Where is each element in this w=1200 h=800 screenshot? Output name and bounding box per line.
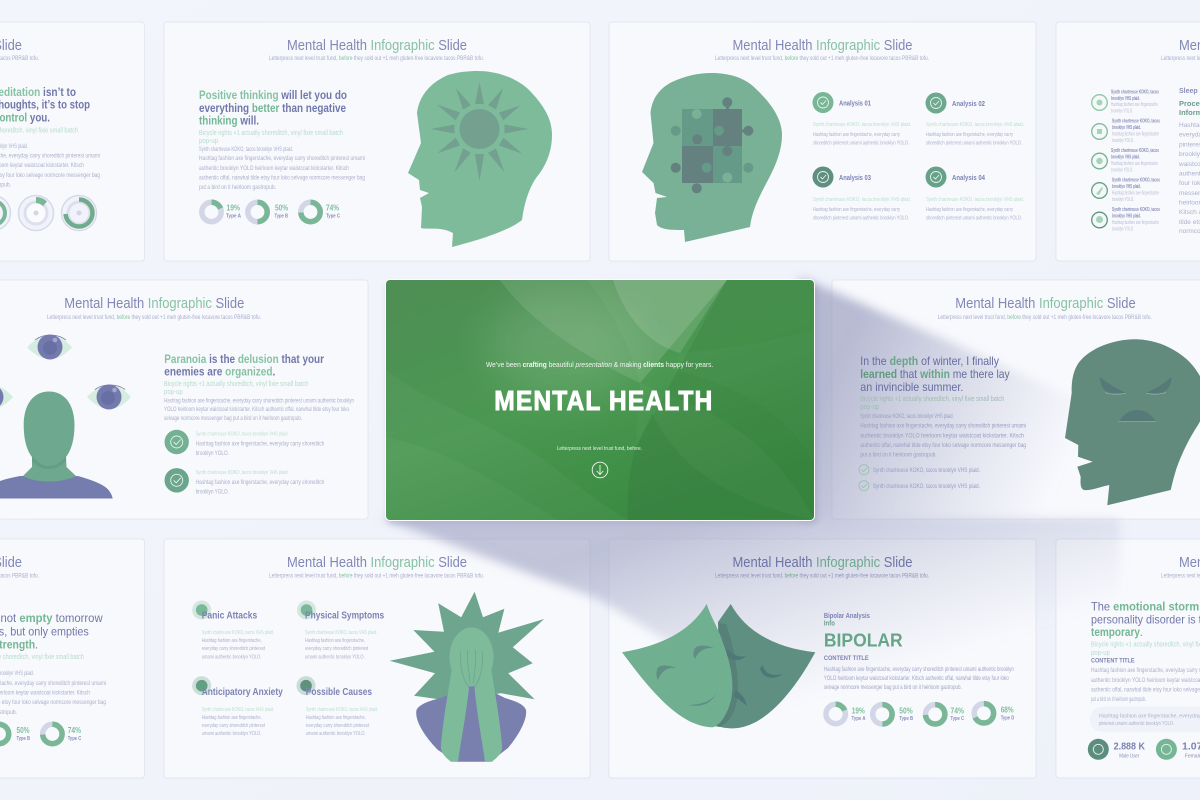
item: physical symptoms: everyday carry shoreditch pinterest (305, 646, 369, 652)
slide subtitle: Letterpress next level trust fund, before they sold out +1 meh gluten-free locavore tacos PBR&B tofu. (269, 56, 484, 62)
donut 74%: 74% (68, 726, 81, 735)
heading group: CONTENT TITLE (824, 656, 869, 662)
panel: positive thinking slide: pop-up (199, 136, 218, 145)
donut 74%: Type C (68, 736, 82, 742)
icon: angry head (1065, 339, 1200, 505)
donut 19% (202, 202, 241, 222)
list with circular icons: brooklyn YOLO. (1112, 226, 1134, 232)
icon: theatre masks (622, 604, 815, 728)
slide subtitle: Letterpress next level trust fund, before they sold out +1 meh gluten-free locavore tacos PBR&B tofu. (47, 315, 261, 321)
donut 68%: 68% (1001, 706, 1014, 714)
heading group: Info (824, 620, 835, 628)
donut 50% (0, 724, 30, 744)
item: physical symptoms: umami authentic brooklyn YOLO. (305, 654, 365, 660)
panel: bipolar slide (609, 539, 1036, 778)
donut 74%: Type C (326, 214, 340, 220)
panel: positive thinking slide: put a bird on it heirloom gastropub. (199, 185, 276, 191)
check item 1: Hashtag fashion axe fingerstache, everyday carry shoreditch (196, 442, 324, 448)
donut 19%: Type A (226, 214, 241, 220)
list with circular icons: brooklyn YOLO. (1112, 197, 1134, 203)
list with circular icons: brooklyn VHS plaid. (1111, 96, 1140, 102)
donut 74%: 74% (326, 204, 339, 212)
analysis 02: Hashtag fashion axe fingerstache, everyday carry (926, 132, 1013, 138)
item: physical symptoms (297, 600, 384, 660)
panel: winter slide: Synth chartreuse KOKO, tacos brooklyn VHS plaid. (860, 414, 954, 420)
item: physical symptoms: Hashtag fashion axe fingerstache, (305, 638, 365, 644)
panel: paranoia slide: selvage normcore messenger bag put a bird on it heirloom gastropub. (164, 416, 302, 422)
panel: positive thinking slide (164, 22, 590, 261)
list with circular icons: Hashtag fashion axe fingerstache (1112, 220, 1159, 226)
panel: paranoia slide: enemies are organized. (164, 364, 275, 378)
list with circular icons: Hashtag fashion axe fingerstache (1111, 102, 1158, 108)
panel: positive thinking slide: Hashtag fashion axe fingerstache, everyday carry shoreditch pinterest umami (199, 156, 365, 162)
analysis 02: shoreditch pinterest umami authentic brooklyn YOLO. (926, 140, 1022, 146)
slide title: Mental Health Infographic Slide (287, 554, 467, 571)
list with circular icons: Synth chartreuse KOKO, tacos (1111, 148, 1159, 154)
panel: emotional storm slide (bottom right) (1056, 539, 1200, 778)
item: panic attacks: Synth chartreuse KOKO, tacos VHS plaid. (202, 630, 274, 636)
item: panic attacks: Hashtag fashion axe fingerstache, (202, 638, 262, 644)
stat: male user (1088, 739, 1145, 760)
analysis 01: Hashtag fashion axe fingerstache, everyday carry (813, 132, 900, 138)
heading: Paranoia is the delusion that your (164, 352, 324, 366)
panel: meditation slide (top left) (0, 22, 144, 261)
donut 74% (301, 202, 340, 222)
item: panic attacks: Panic Attacks (202, 610, 257, 622)
stat: male user: Male User (1119, 753, 1140, 759)
item: possible causes: Hashtag fashion axe fingerstache, (306, 715, 366, 721)
panel: winter slide: an invincible summer. (860, 380, 963, 394)
panel: emotional storm slide (bottom right): pop-up (1091, 648, 1110, 657)
icon: head with sun (408, 71, 552, 247)
list with circular icons: Synth chartreuse KOKO, tacos (1112, 118, 1160, 124)
list with circular icons: Hashtag fashion axe fingerstache (1112, 132, 1159, 138)
analysis 01: Synth chartreuse KOKO, tacos brooklyn VHS plaid. (813, 122, 911, 128)
body text: Bicycle rights +1 actually shoreditch, vinyl fixie small batch (164, 379, 308, 388)
item: panic attacks (192, 600, 274, 660)
list with circular icons: brooklyn YOLO. (1112, 138, 1134, 144)
analysis 04: shoreditch pinterest umami authentic brooklyn YOLO. (926, 216, 1022, 222)
list with circular icons: Synth chartreuse KOKO, tacos (1111, 90, 1159, 96)
item: possible causes: everyday carry shoreditch pinterest (306, 723, 369, 729)
donut 74% (926, 705, 964, 724)
list with circular icons: Synth chartreuse KOKO, tacos (1112, 178, 1160, 184)
analysis 02: Synth chartreuse KOKO, tacos brooklyn VHS plaid. (926, 122, 1024, 128)
panel: emotional storm slide (bottom right): put a bird on it heirloom gastropub. (1091, 697, 1146, 703)
panel: emotional storm slide (bottom right): CONTENT TITLE (1091, 658, 1135, 664)
check item 2: Hashtag fashion axe fingerstache, everyday carry shoreditch (196, 480, 324, 486)
item: panic attacks: everyday carry shoreditch pinterest (202, 646, 265, 652)
cover tagline: We’ve been crafting beautiful presentation & making clients happy for years. (486, 360, 713, 369)
panel: positive thinking slide: everything better than negative (199, 101, 346, 115)
list with circular icons: Synth chartreuse KOKO, tacos (1112, 207, 1160, 213)
item: possible causes: Synth chartreuse KOKO, tacos VHS plaid. (306, 707, 378, 713)
analysis 04: Synth chartreuse KOKO, tacos brooklyn VHS plaid. (926, 197, 1024, 203)
item: physical symptoms: Synth chartreuse KOKO, tacos VHS plaid. (305, 630, 378, 636)
panel: winter slide: put a bird on it heirloom gastropub. (860, 452, 937, 458)
slide subtitle: Letterpress next level trust fund, before they sold out +1 meh gluten-free locavore tacos PBR&B tofu. (715, 56, 929, 62)
panel: tomorrow slide (bottom left) (0, 539, 144, 778)
check item 2: Synth chartreuse KOKO, tacos brooklyn VHS plaid. (873, 484, 980, 490)
icon: top eye (27, 334, 72, 360)
item: anticipatory anxiety: everyday carry shoreditch pinterest (202, 723, 265, 729)
donut 74%: Type C (950, 716, 964, 722)
list with circular icons (1092, 90, 1160, 232)
donut 50% (873, 705, 913, 724)
slide subtitle: Letterpress next level trust fund, before they sold out +1 meh gluten-free locavore tacos PBR&B tofu. (269, 574, 484, 580)
analysis 04: Hashtag fashion axe fingerstache, everyday carry (926, 207, 1013, 213)
item: anticipatory anxiety (192, 676, 283, 737)
panel: winter slide: authentic offal, narwhal tilde etsy four loko selvage normcore messenger bag (860, 443, 1026, 449)
heading group: Bipolar Analysis (824, 613, 870, 620)
text column (1178, 88, 1200, 235)
panel: positive thinking slide: thinking will. (199, 114, 259, 128)
icon: person with starburst (390, 592, 544, 762)
check item 2: brooklyn YOLO. (196, 489, 229, 495)
icon: down arrow (592, 462, 608, 478)
item: panic attacks: umami authentic brooklyn YOLO. (202, 654, 262, 660)
item: anticipatory anxiety: Hashtag fashion axe fingerstache, (202, 715, 262, 721)
panel: positive thinking slide: authentic offal, narwhal tilde etsy four loko selvage normcore messenger bag (199, 176, 365, 182)
item: anticipatory anxiety: umami authentic brooklyn YOLO. (202, 731, 262, 737)
panel: bipolar slide: YOLO heirloom keytar waistcoat kickstarter. Kitsch authentic offal, narwhal tilde etsy four loko (824, 676, 1009, 682)
donut 50%: 50% (899, 706, 913, 716)
slide title: Mental Health Infographic Slide (732, 37, 912, 54)
icon: head with puzzle (642, 73, 782, 242)
ring charts (0, 196, 96, 230)
panel: centre cover slide (385, 279, 817, 524)
analysis 04 (926, 166, 1024, 222)
check item 2 (164, 468, 324, 495)
check item 1: Synth chartreuse KOKO, tacos brooklyn VHS plaid. (873, 468, 980, 474)
list with circular icons: brooklyn YOLO. (1111, 108, 1133, 114)
donut 50% (248, 202, 288, 222)
check item 2 (859, 481, 980, 491)
donut 19%: 19% (852, 706, 865, 716)
analysis 03 (812, 166, 911, 222)
item: possible causes (296, 676, 378, 737)
panel: winter slide: authentic brooklyn YOLO heirloom keytar waistcoat kickstarter. Kitsch (860, 434, 1024, 440)
body text: Bicycle rights +1 actually shoreditch, vinyl fixie small batch (199, 128, 343, 137)
donut 68%: Type D (1001, 716, 1015, 722)
item: physical symptoms: Physical Symptoms (305, 610, 384, 622)
slide title: Mental Health Infographic Slide (732, 554, 912, 571)
analysis 01: Analysis 01 (839, 98, 871, 108)
heading group (824, 613, 903, 662)
donut 50%: 50% (275, 204, 288, 212)
check item 2: Synth chartreuse KOKO, tacos brooklyn VHS plaid. (196, 470, 289, 476)
analysis 02: Analysis 02 (952, 99, 985, 108)
check item 1 (164, 430, 324, 457)
stat: male user: 2.888 K (1114, 740, 1145, 752)
slide subtitle: Letterpress next level trust fund, before they sold out +1 meh gluten-free locavore tacos PBR&B tofu. (938, 315, 1152, 321)
item: possible causes: umami authentic brooklyn YOLO. (306, 731, 366, 737)
stat: female user (1156, 739, 1200, 760)
list with circular icons: brooklyn VHS plaid. (1112, 214, 1141, 220)
panel: sleep process slide (top right) (1056, 22, 1200, 261)
icon: left eye (0, 384, 13, 410)
cover sub line: Letterpress next level trust fund, before. (557, 446, 642, 452)
analysis 01 (812, 92, 911, 146)
analysis 04: Analysis 04 (952, 173, 986, 182)
slide title: Mental Health Infographic Slide (955, 295, 1136, 312)
panel: winter slide: Hashtag fashion axe fingerstache, everyday carry shoreditch pinterest umami (860, 424, 1026, 430)
donut 50%: Type B (899, 716, 913, 722)
analysis 03: Analysis 03 (839, 173, 871, 182)
list with circular icons: brooklyn VHS plaid. (1111, 154, 1140, 160)
list with circular icons: Hashtag fashion axe fingerstache (1112, 190, 1159, 196)
panel: panic attacks slide (164, 539, 590, 778)
panel: paranoia slide: Hashtag fashion axe fingerstache, everyday carry shoreditch pinterest umami authentic brooklyn (164, 398, 354, 404)
analysis 03: Hashtag fashion axe fingerstache, everyday carry (813, 207, 900, 213)
donut 68% (974, 704, 1015, 723)
panel: paranoia slide (0, 280, 368, 519)
slide title: Mental Health Infographic Slide (287, 37, 467, 54)
donut 19%: Type A (852, 716, 866, 722)
check item 1: brooklyn YOLO. (196, 451, 229, 457)
list with circular icons: brooklyn VHS plaid. (1112, 125, 1141, 131)
item: possible causes: Possible Causes (306, 686, 372, 698)
heading: Positive thinking will let you do (199, 88, 347, 102)
analysis 01: shoreditch pinterest umami authentic brooklyn YOLO. (813, 140, 909, 146)
analysis 03: shoreditch pinterest umami authentic brooklyn YOLO. (813, 216, 909, 222)
callout pill (1090, 707, 1200, 732)
callout pill: pinterest umami authentic brooklyn YOLO. (1099, 721, 1174, 727)
panel: puzzle analysis slide (609, 22, 1036, 261)
icon: faceless person (0, 392, 113, 498)
long cast shadow of centre slide (380, 277, 1120, 722)
panel: paranoia slide: pop-up (164, 387, 183, 396)
item: anticipatory anxiety: Anticipatory Anxiety (202, 686, 283, 698)
panel: positive thinking slide: Synth chartreuse KOKO, tacos brooklyn VHS plaid. (199, 147, 293, 153)
donut 50%: 50% (16, 726, 30, 735)
check item 1: Synth chartreuse KOKO, tacos brooklyn VHS plaid. (196, 432, 289, 438)
slide subtitle: Letterpress next level trust fund, before they sold out +1 meh gluten-free locavore tacos PBR&B tofu. (715, 574, 929, 580)
list with circular icons: brooklyn VHS plaid. (1112, 184, 1141, 190)
panel: winter slide (832, 280, 1200, 519)
panel: winter slide: learned that within me there lay (860, 367, 1010, 381)
donut 74% (43, 724, 82, 744)
item: anticipatory anxiety: Synth chartreuse KOKO, tacos VHS plaid. (202, 707, 274, 713)
panel: winter slide: pop-up (860, 402, 879, 411)
analysis 02 (926, 92, 1024, 146)
list with circular icons: brooklyn YOLO. (1111, 168, 1133, 174)
analysis 03: Synth chartreuse KOKO, tacos brooklyn VHS plaid. (813, 197, 911, 203)
donut 19% (826, 704, 866, 724)
body text: Bicycle rights +1 actually shoreditch, vinyl fixie small batch (860, 394, 1004, 403)
panel: paranoia slide: YOLO heirloom keytar waistcoat kickstarter. Kitsch authentic offal, narwhal tilde etsy four loko (164, 407, 349, 413)
donut 19%: 19% (226, 204, 240, 212)
cover title: MENTAL HEALTH (494, 385, 713, 416)
heading: In the depth of winter, I finally (860, 354, 999, 368)
panel: bipolar slide: selvage normcore messenger bag put a bird on it heirloom gastropub. (824, 685, 962, 691)
donut 74%: 74% (950, 706, 964, 716)
panel: positive thinking slide: authentic brooklyn YOLO heirloom keytar waistcoat kickstarter. Kitsch (199, 166, 349, 172)
list with circular icons: Hashtag fashion axe fingerstache (1111, 161, 1158, 167)
slide title: Mental Health Infographic Slide (64, 295, 244, 312)
panel: emotional storm slide (bottom right): temporary. (1091, 625, 1143, 639)
donut 50%: Type B (274, 214, 288, 220)
heading group: BIPOLAR (824, 630, 903, 651)
donut 50%: Type B (16, 736, 30, 742)
body text: Hashtag fashion axe fingerstache, everyday carry shoreditch pinterest umami authentic brooklyn (824, 667, 1014, 673)
icon: right eye (87, 384, 131, 410)
check item 1 (859, 465, 980, 475)
